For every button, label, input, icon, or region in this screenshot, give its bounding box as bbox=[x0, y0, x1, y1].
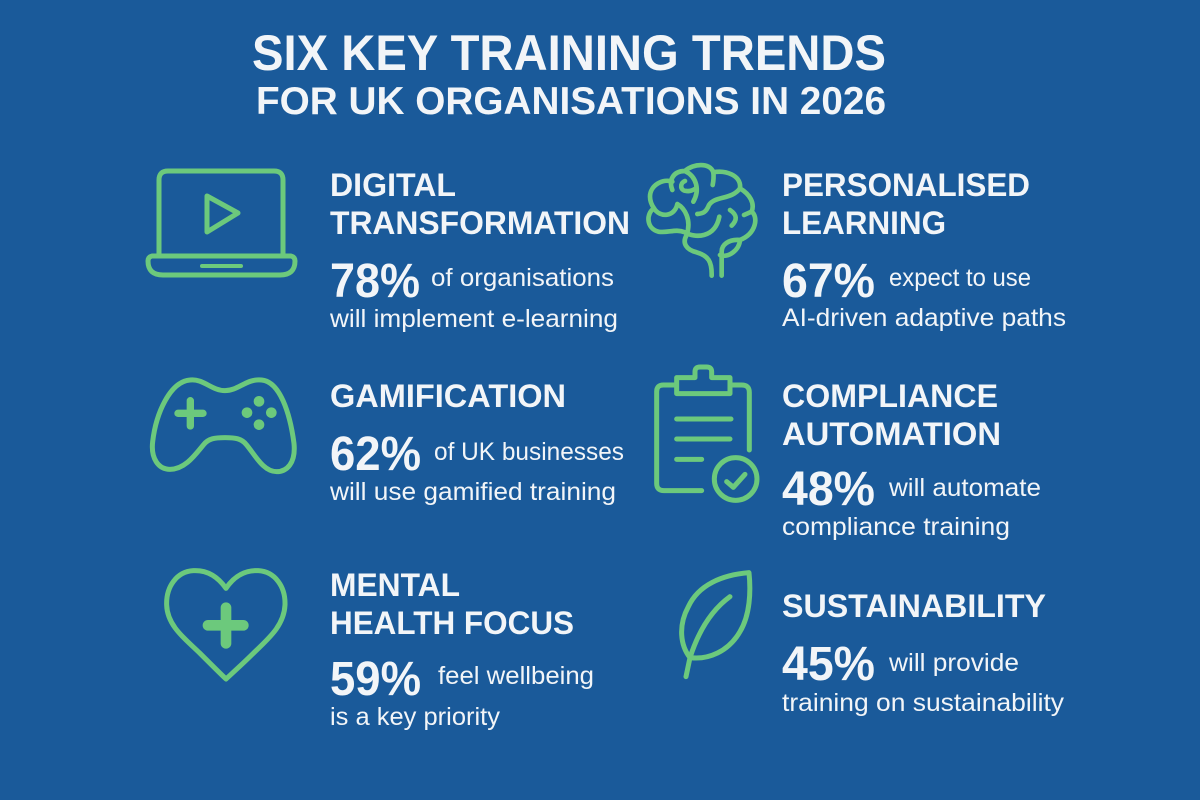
statistic: of organisations bbox=[431, 264, 614, 292]
statistic: 78% bbox=[330, 255, 420, 308]
statistic: 59% bbox=[330, 653, 421, 706]
panel: mental health focus bbox=[167, 567, 594, 731]
heading: AUTOMATION bbox=[782, 416, 1001, 452]
statistic: AI-driven adaptive paths bbox=[782, 304, 1066, 332]
statistic: of UK businesses bbox=[434, 438, 624, 466]
panel: sustainability bbox=[682, 573, 1065, 717]
heading bbox=[330, 567, 574, 641]
icon: heart with plus bbox=[167, 571, 285, 679]
statistic bbox=[782, 255, 1066, 332]
statistic: will provide bbox=[888, 649, 1019, 677]
heading: HEALTH FOCUS bbox=[330, 605, 574, 641]
statistic: compliance training bbox=[782, 513, 1010, 541]
panel: digital transformation bbox=[148, 167, 630, 333]
heading: GAMIFICATION bbox=[330, 378, 566, 414]
icon: game controller bbox=[152, 380, 294, 472]
heading: PERSONALISED bbox=[782, 167, 1030, 203]
statistic bbox=[329, 255, 618, 333]
heading: LEARNING bbox=[782, 205, 946, 241]
heading: TRANSFORMATION bbox=[330, 205, 630, 241]
statistic: is a key priority bbox=[330, 703, 501, 731]
icon: brain bbox=[648, 165, 755, 276]
statistic bbox=[782, 638, 1065, 717]
heading bbox=[782, 378, 1001, 452]
icon: laptop with play button bbox=[148, 171, 295, 275]
statistic: 48% bbox=[782, 463, 875, 516]
statistic bbox=[330, 653, 594, 731]
statistic: 67% bbox=[782, 255, 875, 308]
heading bbox=[782, 167, 1030, 241]
statistic: 62% bbox=[330, 428, 421, 481]
panel: personalised learning bbox=[648, 165, 1066, 332]
statistic: will use gamified training bbox=[329, 478, 616, 506]
heading: SUSTAINABILITY bbox=[782, 588, 1046, 624]
statistic: 45% bbox=[782, 638, 875, 691]
heading: DIGITAL bbox=[330, 167, 456, 203]
statistic: expect to use bbox=[889, 264, 1031, 292]
statistic: will automate bbox=[888, 474, 1041, 502]
panel: gamification bbox=[152, 378, 624, 506]
heading bbox=[330, 167, 630, 241]
title: SIX KEY TRAINING TRENDS bbox=[252, 25, 886, 81]
icon: leaf bbox=[682, 573, 750, 677]
icon: clipboard with check bbox=[657, 367, 757, 500]
statistic bbox=[329, 428, 624, 506]
statistic bbox=[782, 463, 1041, 541]
heading: COMPLIANCE bbox=[782, 378, 998, 414]
title bbox=[252, 25, 886, 123]
statistic: feel wellbeing bbox=[438, 662, 594, 690]
heading: MENTAL bbox=[330, 567, 460, 603]
statistic: will implement e-learning bbox=[329, 305, 618, 333]
title: FOR UK ORGANISATIONS IN 2026 bbox=[256, 80, 886, 123]
statistic: training on sustainability bbox=[782, 689, 1065, 717]
panel: compliance automation bbox=[657, 367, 1041, 541]
